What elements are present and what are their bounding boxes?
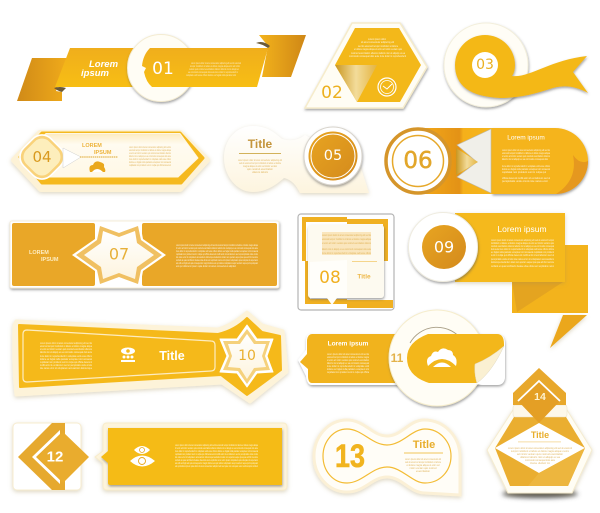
body text: Lorem ipsum dolor sit amet consectetur adipiscing elit sed do eiusmod	[508, 447, 572, 450]
number 07: 07	[109, 244, 129, 264]
body text: Lorem ipsum dolor sit amet consectetur adipiscing elit	[238, 159, 282, 162]
pointer	[63, 148, 81, 168]
body text: doloremque laudantium totam rem aperiam eaque ipsa quae ab illo inventore	[491, 261, 554, 264]
text panel	[322, 232, 371, 255]
body text: et dolore magna aliqua ut enim ad	[406, 464, 440, 467]
body text: Lorem ipsum dolor sit amet consectetur adipiscing elit sed do eiusmod tempor incididunt ut labore et dolore magna aliqua	[175, 444, 258, 447]
number 02: 02	[321, 83, 343, 103]
body text	[238, 159, 282, 174]
body text: sunt in culpa qui officia deserunt mollit anim id est laborum sed ut	[491, 254, 554, 257]
body text: Lorem ipsum dolor sit amet consectetur elit sed do	[327, 353, 369, 356]
number 14: 14	[534, 391, 546, 403]
body text: ullamco laboris	[252, 171, 269, 174]
heading: LOREM	[82, 143, 102, 149]
body text	[405, 458, 441, 473]
right band	[142, 48, 268, 87]
body text	[327, 353, 370, 374]
title: Title	[248, 137, 273, 151]
body text: eiusmod tempor incididunt ut labore et dolore magna	[327, 356, 369, 359]
chevron	[518, 381, 560, 401]
right ribbon tail	[259, 35, 306, 77]
heading: Lorem ipsum	[328, 340, 369, 348]
body text: iste natus error sit voluptatem accusantium doloremque	[40, 367, 93, 370]
text panel content: Lorem ipsum dolor sit amet consectetur adipiscing elit sed do	[322, 234, 371, 237]
title: Title	[357, 274, 371, 280]
body text: ut enim ad minim veniam quis nostrud exercitation ullamco	[40, 348, 92, 351]
left yellow part	[300, 334, 395, 383]
body text	[349, 38, 406, 58]
fold triangle	[335, 65, 377, 102]
inner cream area	[22, 134, 198, 177]
outer diamond	[18, 423, 65, 490]
ring	[389, 310, 485, 406]
body text	[491, 239, 555, 268]
body text: irure dolor in reprehenderit in voluptate velit esse cillum dolore eu fugiat nulla pariatur excepteur sint occaecat	[175, 450, 258, 453]
body text: cupidatat non proident sunt in culpa qui officia	[327, 371, 370, 374]
body text	[502, 149, 550, 183]
body text: ut enim ad minim veniam quis nostrud exercitation ullamco	[502, 155, 550, 158]
body text: ut enim ad minim veniam quis nostrud exercitation ullamco	[129, 152, 171, 155]
number 03: 03	[476, 57, 494, 73]
left ribbon tail	[17, 58, 68, 101]
gold triangle	[456, 148, 478, 175]
cream backing	[305, 23, 427, 108]
body text	[40, 342, 93, 370]
star	[220, 325, 273, 387]
body text: ut enim ad minim veniam quis nostrud exercitation	[327, 359, 369, 362]
number 06: 06	[403, 148, 433, 174]
title: Title	[531, 430, 549, 440]
body text: eiusmod tempor incididunt ut labore et dolore magna aliqua	[502, 152, 550, 155]
heading: IPSUM	[94, 150, 112, 156]
panel 13: infinity blob	[314, 420, 460, 495]
inner outline	[23, 330, 215, 382]
body text: cupidatat non proident sunt in culpa qui officia deserunt	[129, 164, 171, 167]
body text: laboris nisi ut aliquip ex ea commodo consequat duis aute	[129, 155, 171, 158]
right rectangle	[142, 223, 277, 286]
body text: est qui dolorem ipsum quia dolor sit amet consectetur adipisci velit sed quia non numquam eius modi tempora incidunt	[175, 465, 258, 468]
body text: cupidatat non proident sunt in culpa qui officia deserunt mollit anim id est laborum sed ut perspiciatis unde omnis	[175, 453, 258, 456]
cream blob	[314, 420, 460, 495]
body text: sed do eiusmod tempor incididunt ut labore et dolore	[239, 162, 281, 165]
pill right	[492, 128, 588, 194]
body text: veritatis et quasi architecto beatae vitae dicta sunt explicabo nemo enim ipsam voluptatem quia voluptas sit aspernatur	[176, 259, 258, 262]
body text: cupidatat non proident sunt in culpa qui officia deserunt mollit anim id est laborum sed ut perspiciatis unde omnis	[176, 253, 258, 256]
white band	[513, 405, 567, 417]
ribbon curl shadows	[54, 42, 270, 92]
lorem ipsum heading: ipsum	[81, 68, 110, 79]
body text: veritatis et quasi architecto beatae vitae dicta sunt explicabo nemo	[491, 265, 555, 268]
body text: aut odit aut fugit sed quia consequuntur magni dolores eos qui ratione voluptatem sequi nesciunt neque porro quisquam	[175, 462, 258, 465]
body text: incididunt ut labore et dolore magna aliqua ut enim ad minim veniam quis	[491, 242, 555, 245]
body text: Ut enim ad minim veniam quis nostrud exercitation ullamco laboris nisi ut aliquip ex ea commodo consequat duis aute	[175, 447, 258, 450]
white diamond	[495, 423, 585, 473]
panel 05: title and number blob	[224, 126, 369, 193]
body text: Lorem ipsum dolor sit amet consectetur adipiscing elit sed do eiusmod tempor	[491, 239, 554, 242]
frame	[298, 214, 394, 310]
icon: eyes	[130, 446, 155, 466]
panel 06: pill with arrow	[386, 128, 588, 194]
text panel content: eiusmod tempor incididunt ut labore et dolore magna aliqua	[322, 238, 371, 241]
icon: cloud	[89, 161, 105, 172]
yellow quadrants	[302, 217, 393, 308]
fold shade	[528, 448, 585, 486]
number 01: 01	[152, 59, 174, 79]
body text: exercitation	[416, 470, 431, 473]
body text: veniam quis nostrud exercitation ullamco laboris nisi ut aliquip ex	[189, 68, 240, 71]
body text: nostrud exercitation ullamco laboris nisi ut aliquip ex ea commodo consequat	[491, 245, 554, 248]
rule	[518, 440, 561, 443]
rule	[404, 452, 443, 454]
ground shadow	[502, 490, 578, 498]
number 08: 08	[319, 268, 341, 288]
number 11: 11	[391, 351, 404, 365]
panel 10: long label with star	[14, 312, 287, 402]
cream backing	[14, 312, 287, 402]
body text	[175, 444, 258, 468]
body text: mollit anim id est laborum sed ut perspiciatis unde omnis	[40, 364, 93, 367]
yellow right part	[407, 334, 504, 383]
yellow shape	[19, 318, 281, 395]
chevron	[32, 430, 60, 484]
back fold	[512, 245, 588, 313]
body text: irure dolor in reprehenderit in voluptate velit esse cillum	[502, 165, 550, 168]
body text: laboris nisi ut aliquip ex ea commodo consequat duis aute	[40, 351, 92, 354]
star	[72, 223, 166, 287]
cream backing	[95, 423, 287, 490]
body text: quis nostrud exercitation	[247, 168, 274, 171]
body text: cupidatat non proident sunt in culpa qui officia deserunt	[40, 361, 92, 364]
body text: Ut enim ad minim veniam quis nostrud exercitation ullamco laboris nisi ut aliquip ex ea commodo consequat duis aute	[176, 247, 258, 250]
body text	[508, 447, 572, 465]
body text	[176, 244, 258, 268]
title: Title	[159, 349, 185, 363]
text panel content: irure dolor in reprehenderit in voluptate velit esse cillum	[322, 252, 371, 255]
body text: Lorem ipsum dolor sit amet consectetur adipiscing elit sed do eiusmod tempor incididunt ut labore et dolore magna aliqua	[176, 244, 258, 247]
badge	[14, 129, 70, 185]
body text: Lorem ipsum dolor sit amet consectetur adipiscing elit sed do eiusmod	[191, 62, 241, 65]
lorem ipsum heading: Lorem	[89, 59, 119, 70]
body text: minim veniam quis nostrud	[410, 467, 437, 470]
body text: Lorem ipsum dolor	[368, 38, 386, 41]
number disc	[386, 129, 450, 193]
body text: eu fugiat nulla pariatur excepteur sint occaecat cupidatat non proident	[491, 251, 554, 254]
heading	[82, 143, 112, 156]
panel 07: two rectangles with star	[10, 221, 279, 288]
heading: IPSUM	[41, 257, 59, 263]
body text: magna aliqua ut enim ad minim veniam	[243, 165, 277, 168]
body text: dolore eu fugiat nulla pariatur excepteur sint occaecat	[502, 168, 550, 171]
lorem ipsum heading	[81, 59, 119, 79]
number 09: 09	[434, 238, 454, 256]
body text: tempor incididunt ut labore et dolore magna aliqua ut enim	[511, 450, 569, 453]
panel 02: hexagon	[305, 23, 427, 108]
icon: cloud	[427, 348, 457, 367]
yellow outline	[323, 429, 451, 483]
number disc	[304, 127, 362, 185]
panel 08: framed square	[298, 214, 394, 310]
banner	[455, 213, 565, 282]
title: Title	[413, 439, 435, 451]
white tag base	[298, 334, 505, 385]
number 13: 13	[335, 438, 365, 474]
body text: iste natus error sit voluptatem accusantium doloremque laudantium totam rem aperiam eaque ipsa quae ab illo inventore	[175, 456, 258, 459]
body text: Lorem ipsum dolor sit amet consectetur adipiscing elit sed do	[40, 342, 92, 345]
heading	[29, 250, 59, 263]
text panel content: laboris nisi ut aliquip ex ea commodo consequat duis aute	[322, 248, 371, 251]
card	[308, 225, 384, 298]
body text: aut odit aut fugit sed quia consequuntur magni dolores eos qui ratione voluptatem sequi nesciunt neque porro quisquam	[176, 262, 258, 265]
body text: irure dolor in	[530, 462, 551, 465]
panel 01: ribbon banner	[17, 34, 306, 102]
body text: veritatis et quasi architecto beatae vitae dicta sunt explicabo nemo enim ipsam voluptatem quia voluptas sit aspernatur	[175, 459, 258, 462]
body text: duis aute irure dolor in reprehenderit in voluptate velit esse cillum dolore	[491, 248, 554, 251]
number 10: 10	[238, 348, 256, 364]
paper arrow	[457, 129, 491, 193]
rule	[352, 261, 377, 262]
tail	[550, 315, 587, 348]
body text: sed do eiusmod tempor incididunt ut labore	[405, 461, 441, 464]
number disc	[472, 52, 498, 78]
cream hexagon	[487, 410, 592, 493]
cream backing	[14, 133, 207, 189]
body text: laboris nisi ut aliquip ex ea commodo consequat duis	[502, 158, 549, 161]
body text: irure dolor in reprehenderit in voluptate velit esse cillum	[129, 158, 171, 161]
fold shade	[512, 282, 563, 312]
body text: nostrud exercitation ullamco laboris nisi ut aliquip ex ea	[351, 52, 406, 55]
number tag	[310, 260, 347, 305]
outer circle	[444, 23, 528, 107]
body text: Lorem ipsum dolor sit amet consectetur adipiscing elit sed do	[502, 149, 550, 152]
white square	[13, 423, 81, 490]
panel 03: circle with ribbon	[444, 23, 588, 107]
body text: irure dolor in reprehenderit in voluptate velit esse cillum dolore eu fugiat nulla pariatur excepteur sint occaecat	[176, 250, 258, 253]
body text: Lorem ipsum dolor sit amet consectetur adipiscing elit sed do	[129, 146, 171, 149]
heading: LOREM	[29, 250, 49, 256]
number disc	[422, 225, 466, 269]
body text: dolore eu fugiat nulla pariatur excepteur sint occaecat	[129, 161, 171, 164]
number 05: 05	[324, 148, 342, 164]
body text: et dolore magna aliqua ut enim ad minim veniam quis	[354, 48, 403, 51]
yellow rectangle	[101, 428, 282, 485]
hole shadow	[410, 327, 462, 343]
body text: eiusmod tempor incididunt ut labore et dolore magna aliqua	[40, 345, 92, 348]
band	[420, 128, 492, 194]
number 12: 12	[47, 448, 63, 466]
yellow hexagon	[335, 28, 421, 102]
panel 12: diamond badge and rectangle	[13, 423, 287, 490]
heading: Lorem ipsum	[497, 224, 547, 234]
cream blob	[224, 126, 369, 193]
body text: est qui dolorem ipsum quia dolor sit amet consectetur adipisci	[176, 265, 236, 268]
body text: Lorem ipsum dolor sit amet consectetur elit	[405, 458, 441, 461]
body text: perspiciatis unde omnis iste natus error	[502, 180, 548, 183]
body text: voluptate velit esse cillum dolore eu fugiat nulla pariatur sint	[186, 74, 236, 77]
left rectangle	[12, 223, 95, 286]
panel 11: tag with ring	[298, 310, 505, 406]
ring	[128, 34, 194, 102]
body text	[186, 62, 241, 77]
heading: Lorem ipsum	[507, 134, 545, 142]
body text: irure dolor in reprehenderit in voluptate velit	[327, 365, 369, 368]
body text: ea commodo consequat duis aute irure dolor in reprehenderit in	[188, 71, 238, 74]
page curl	[475, 346, 504, 383]
ring	[408, 212, 478, 282]
icon: clock	[378, 78, 396, 96]
icon: eye and people	[121, 348, 135, 362]
body text: eiusmod tempor incididunt ut labore et dolore magna aliqua	[129, 149, 171, 152]
number 04: 04	[32, 148, 52, 166]
body text: perspiciatis unde omnis iste natus error sit voluptatem accusantium	[491, 258, 554, 261]
body text: cupidatat non proident sunt in culpa qui	[502, 171, 546, 174]
body text: tempor incididunt ut labore et dolore magna aliqua enim ad minim	[190, 65, 240, 68]
left band	[55, 48, 140, 87]
body text: irure dolor in reprehenderit in voluptate velit esse cillum	[40, 355, 92, 358]
curl shade	[556, 155, 588, 194]
body text: ad minim veniam quis nostrud exercitation	[517, 453, 564, 456]
body text: dolore eu fugiat nulla pariatur excepteur sint	[327, 368, 369, 371]
ribbon	[455, 35, 588, 98]
small diamond	[37, 432, 89, 483]
body text	[129, 146, 171, 167]
text panel content: ut enim ad minim veniam quis nostrud exercitation ullamco	[322, 242, 371, 245]
panel 14: envelope hexagon	[487, 368, 592, 498]
top flap	[513, 368, 566, 405]
body text: sit amet consectetur adipiscing elit	[361, 41, 394, 44]
body text: sed do eiusmod tempor incididunt ut labore	[358, 45, 399, 48]
body text: dolore eu fugiat nulla pariatur excepteur sint occaecat	[40, 358, 92, 361]
dashed line	[80, 156, 118, 158]
body text: iste natus error sit voluptatem accusantium doloremque laudantium totam rem aperiam eaque ipsa quae ab illo inventore	[176, 256, 258, 259]
white corner	[475, 346, 505, 384]
yellow frame	[20, 133, 203, 183]
panel 04: elongated hexagon	[14, 129, 207, 189]
rule	[239, 153, 281, 154]
body text: officia deserunt mollit anim id est laborum sed ut	[502, 177, 550, 180]
body text: commodo consequat duis aute	[525, 459, 556, 462]
gold hexagon	[495, 417, 585, 486]
white backing	[10, 221, 279, 288]
small diamond	[518, 381, 560, 423]
panel 09: circle with folded banner	[408, 212, 588, 348]
body text: laboris nisi ut aliquip ex ea commodo consequat	[327, 362, 369, 365]
text panel content	[322, 234, 371, 255]
body text: commodo consequat duis aute irure dolor in reprehenderit	[349, 55, 406, 58]
body text: ullamco laboris nisi ut aliquip ex ea	[520, 456, 561, 459]
